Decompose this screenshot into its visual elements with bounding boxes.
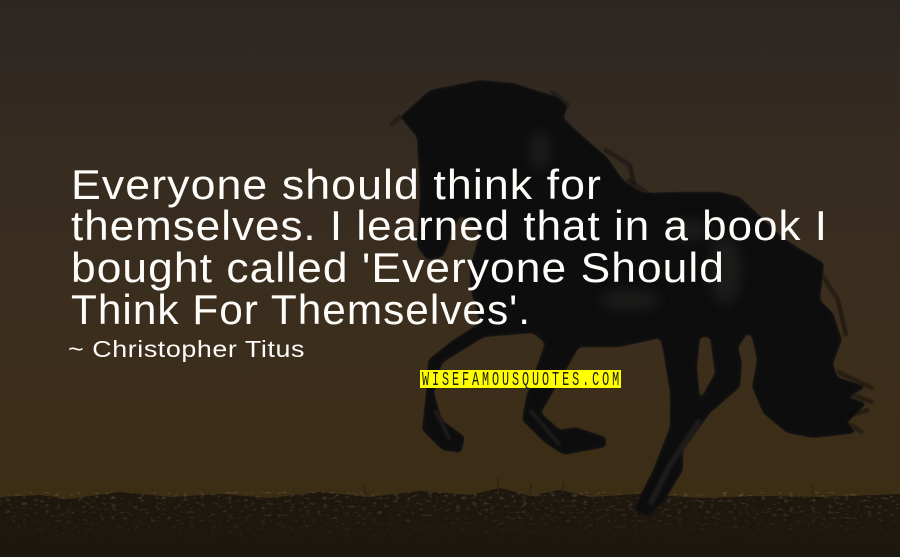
quote text: Everyone should think for [71,161,602,208]
author attribution: ~ Christopher Titus [68,336,305,362]
quote text: themselves. I learned that in a book I [71,202,828,249]
horse lower leg highlights [435,410,700,505]
horse hair strands [392,92,872,432]
horse coat highlights [530,130,741,310]
watermark badge: WISEFAMOUSQUOTES.COM [422,369,619,391]
horse silhouette [392,80,872,517]
quote text: bought called 'Everyone Should [71,244,725,291]
quote text: Think For Themselves'. [71,286,531,333]
grass meadow [0,478,900,557]
quote text [71,161,828,333]
